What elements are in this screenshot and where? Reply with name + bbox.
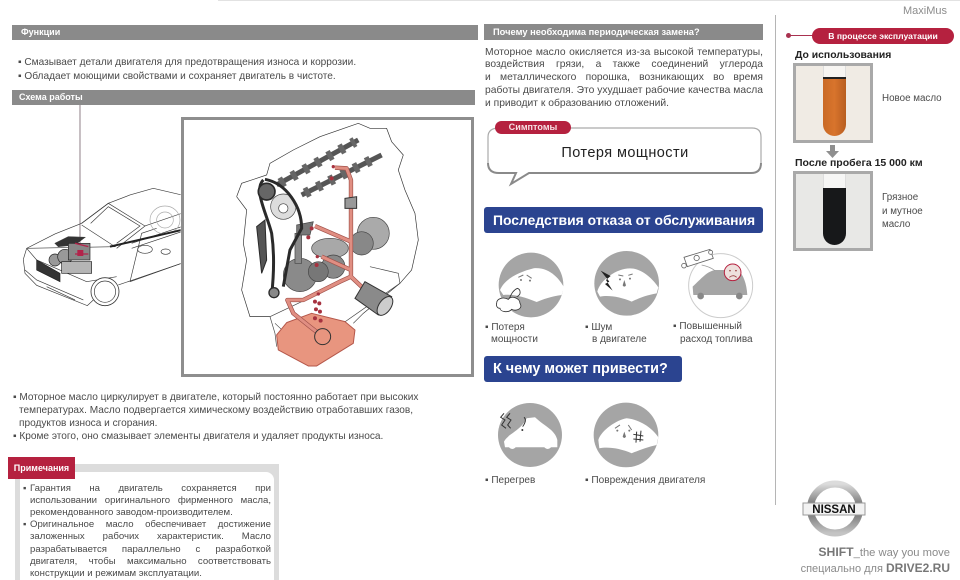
notes text: конструкции и режимам эксплуатации.	[30, 568, 202, 579]
icon: engine noise	[594, 251, 659, 316]
heading: why replacement is needed	[484, 24, 763, 40]
label: power loss: ▪ Потеря	[485, 322, 525, 333]
image: used oil test tube	[793, 171, 873, 251]
heading: operating scheme: Схема работы	[19, 92, 83, 102]
tag: notes	[8, 457, 75, 479]
notes text: заложенных рабочих характеристик. Масло	[30, 531, 271, 542]
text block: why replacement is needed	[485, 46, 763, 109]
label: fuel consumption: ▪ Повышенный	[673, 321, 742, 332]
heading: what it can lead to: К чему может привести?	[493, 361, 668, 377]
icon: power loss	[496, 253, 564, 317]
text block: why replacement is needed: воздействия грязи, а также соединений углерода	[485, 59, 763, 70]
notes text: двигателя, чтобы максимально соответствовать	[30, 556, 271, 567]
label: engine noise: в двигателе	[592, 334, 647, 344]
panel: engine lubrication diagram	[181, 117, 474, 377]
notes text: Оригинальное масло обеспечивает достижение	[30, 519, 271, 530]
icon: engine damage	[594, 403, 658, 467]
text block: how it works	[13, 392, 418, 442]
notes text: Гарантия на двигатель сохраняется при	[30, 482, 271, 494]
top rule	[218, 0, 960, 1]
camshafts	[277, 140, 382, 195]
heading: before use: До использования	[795, 50, 891, 61]
label: power loss	[485, 322, 538, 344]
panel: notes	[15, 464, 279, 580]
droplets	[306, 165, 335, 323]
label: engine damage: ▪ Повреждения двигателя	[585, 475, 705, 486]
text block: why replacement is needed: Моторное масло окисляется из-за высокой температуры,	[485, 46, 763, 58]
label: dirty oil: Грязное	[882, 192, 918, 203]
heading: after mileage: После пробега 15 000 км	[795, 157, 923, 169]
heading: functions: Функции	[21, 27, 60, 37]
label: overheating: ▪ Перегрев	[485, 475, 535, 486]
image: new oil test tube	[793, 63, 873, 143]
label: engine noise: ▪ Шум	[585, 322, 612, 333]
label: fuel consumption: расход топлива	[680, 334, 753, 344]
icon: overheating	[498, 403, 562, 467]
text block: functions: ▪ Обладает моющими свойствами и сохраняет двигатель в чистоте.	[18, 70, 336, 82]
credit: DRIVE2.RU: специально для DRIVE2.RU	[801, 561, 950, 575]
label: dirty oil	[882, 192, 923, 230]
text block: how it works: продуктов износа и сгорания.	[19, 418, 157, 428]
filter	[345, 197, 396, 318]
label: dirty oil: и мутное	[882, 206, 923, 216]
illustration: car with engine	[23, 105, 181, 306]
heading: consequences of neglected maintenance: Последствия отказа от обслуживания	[493, 212, 755, 228]
crankshaft	[271, 194, 389, 292]
notes text: рекомендованного заводом-производителем.	[30, 507, 233, 518]
icon: fuel consumption	[682, 249, 753, 318]
symptom text: Потеря мощности	[561, 144, 689, 160]
notes text	[23, 482, 271, 579]
label: power loss: мощности	[491, 334, 538, 344]
label: engine noise	[585, 322, 647, 344]
notes text: ▪	[23, 482, 26, 494]
callout: symptoms	[487, 121, 762, 186]
logo: Nissan	[802, 480, 866, 536]
text block: how it works: ▪ Кроме этого, оно смазывает элементы двигателя и удаляет продукты износа.	[13, 430, 383, 442]
heading: operating scheme	[12, 90, 475, 105]
label: fuel consumption	[673, 321, 753, 344]
notes text: ▪	[23, 519, 26, 530]
label: new oil: Новое масло	[882, 93, 942, 104]
timing chain	[257, 179, 302, 298]
heading: functions	[12, 25, 478, 40]
text block: functions: ▪ Смазывает детали двигателя для предотвращения износа и коррозии.	[18, 56, 356, 68]
text block: how it works: ▪ Моторное масло циркулирует в двигателе, который постоянно работает при высоких	[13, 392, 418, 402]
symptoms tag: Симптомы	[509, 122, 557, 132]
tagline: SHIFT: SHIFT_the way you move	[818, 545, 950, 559]
heading: why replacement is needed: Почему необходима периодическая замена?	[493, 27, 700, 37]
arrow: before to after	[826, 145, 839, 158]
column divider	[775, 15, 776, 505]
tag: in operation: В процессе эксплуатации	[828, 31, 938, 41]
label: dirty oil: масло	[882, 219, 910, 230]
heading: consequences of neglected maintenance	[484, 207, 763, 233]
oil pan	[277, 313, 355, 366]
text block: how it works: температурах. Масло подвергается химическому воздействию отработавших газов,	[19, 404, 413, 416]
symptoms tag	[495, 121, 571, 134]
tag: in operation	[786, 28, 954, 44]
text block: why replacement is needed: и приводит к образованию отложений.	[485, 98, 669, 109]
text block: why replacement is needed: работы двигателя. Это ухудшает рабочие качества масла	[485, 85, 763, 96]
text block: functions	[18, 56, 356, 82]
tag: notes: Примечания	[14, 463, 69, 473]
logo: Nissan: NISSAN	[812, 504, 856, 516]
notes text: использовании оригинального фирменного масла,	[30, 495, 271, 506]
oil channels	[287, 168, 363, 338]
text block: why replacement is needed: и металлического порошка, возникающих во время	[485, 72, 763, 83]
notes text: разрабатывается параллельно с разработкой	[30, 544, 271, 555]
watermark: MaxiMus: MaxiMus	[903, 5, 947, 17]
heading: what it can lead to	[484, 356, 682, 382]
